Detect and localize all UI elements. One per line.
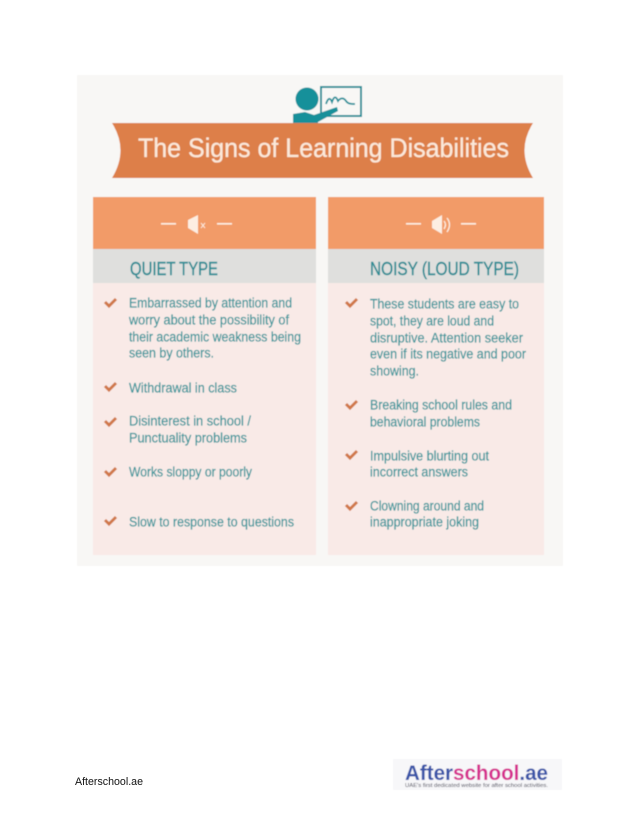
logo: afterschool.ae: UAE's first dedicated website for after school activities.	[405, 783, 548, 789]
item 1: spot, they are loud and	[370, 314, 494, 328]
icon: loud speaker	[406, 215, 476, 234]
item 2	[346, 398, 512, 430]
item 1: seen by others.	[129, 346, 214, 360]
item 1: disruptive. Attention seeker	[370, 330, 523, 346]
title banner	[112, 123, 533, 178]
item 1: Embarrassed by attention and	[129, 296, 292, 310]
logo: afterschool.ae	[393, 759, 562, 790]
list background	[328, 283, 544, 555]
item 3: incorrect answers	[370, 464, 468, 480]
icon: teacher at board	[293, 87, 361, 123]
heading band	[93, 249, 316, 283]
panel: quiet type	[93, 197, 316, 555]
heading: NOISY (LOUD TYPE)	[370, 259, 519, 279]
heading band	[328, 249, 544, 283]
item 3: Punctuality problems	[129, 430, 247, 446]
panel header	[328, 197, 544, 249]
item 1: showing.	[370, 364, 419, 378]
item 1	[105, 296, 301, 360]
item 4: inappropriate joking	[370, 514, 479, 530]
panel: noisy type	[328, 197, 544, 555]
item 4	[346, 498, 484, 530]
logo: afterschool.ae: Afterschool.ae	[405, 762, 548, 785]
item 4: Works sloppy or poorly	[129, 464, 252, 480]
item 3: Disinterest in school /	[129, 414, 251, 428]
title: The Signs of Learning Disabilities	[138, 133, 509, 163]
item 1: worry about the possibility of	[128, 312, 289, 328]
item 1: These students are easy to	[370, 296, 519, 312]
item 1: their academic weakness being	[129, 330, 301, 344]
infographic card	[77, 75, 563, 566]
item 5: Slow to response to questions	[129, 514, 294, 530]
panel header	[93, 197, 316, 249]
item 3	[105, 414, 251, 446]
item 1	[346, 296, 526, 378]
item 2: behavioral problems	[370, 414, 480, 430]
item 2: Breaking school rules and	[370, 398, 512, 412]
list background	[93, 283, 316, 555]
item 3	[346, 448, 489, 480]
item 3: Impulsive blurting out	[370, 448, 489, 464]
heading: QUIET TYPE	[130, 259, 218, 279]
card background	[77, 75, 563, 566]
item 4: Clowning around and	[370, 498, 484, 514]
item 1: even if its negative and poor	[370, 346, 526, 362]
footer text: Afterschool.ae	[75, 776, 143, 788]
item 2: Withdrawal in class	[129, 380, 237, 396]
icon: muted speaker	[161, 215, 232, 234]
